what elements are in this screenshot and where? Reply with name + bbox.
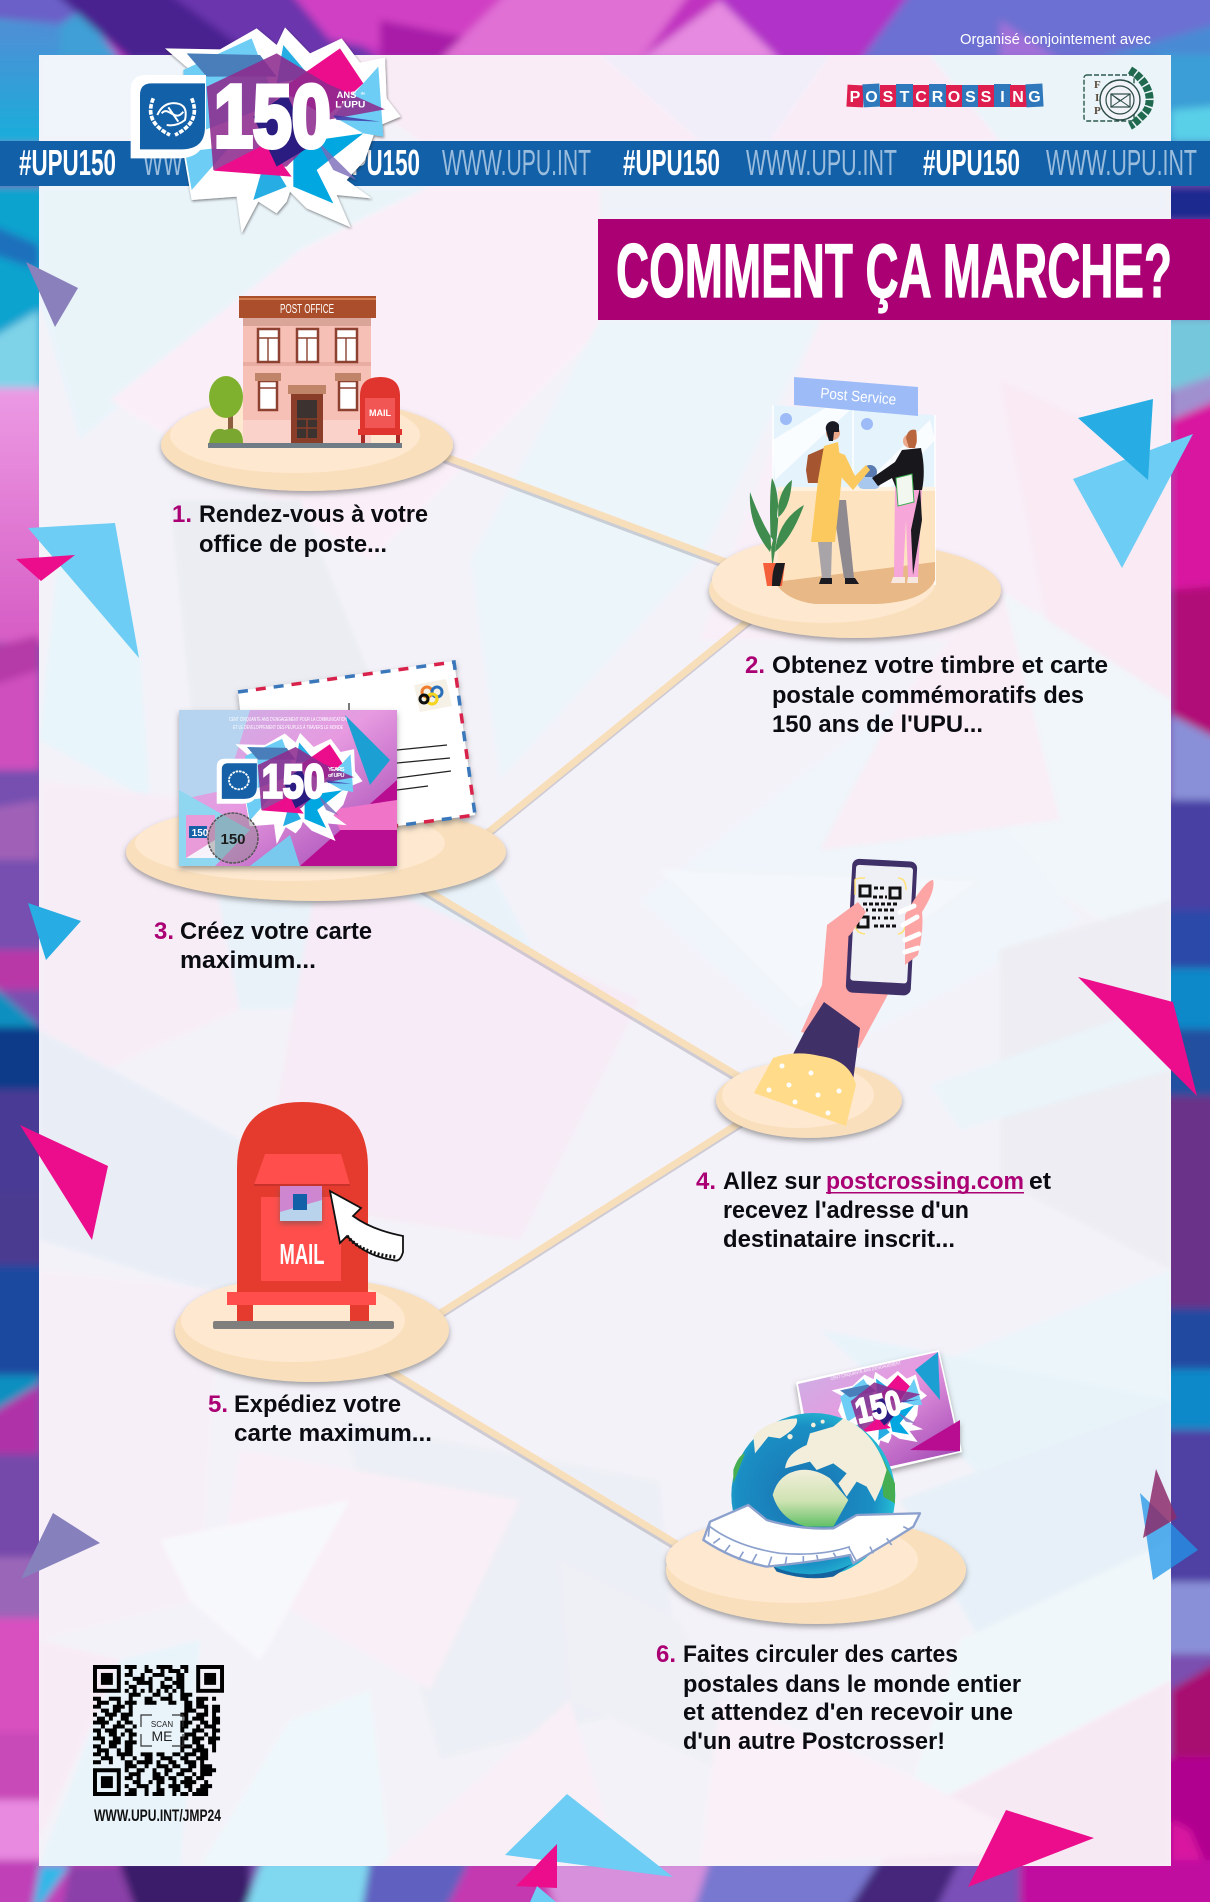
top strip	[0, 0, 1210, 60]
UPU badge	[131, 75, 206, 158]
header band: WWW.UPU.INT	[143, 142, 292, 183]
text: step 3: maximum...	[180, 947, 316, 974]
step 5: mailbox	[175, 1102, 449, 1447]
text: step 4: destinataire inscrit...	[723, 1226, 955, 1253]
header band: #UPU150	[923, 142, 1020, 183]
scan me label: SCAN	[151, 1720, 173, 1729]
icon: front of maximum card: CENT CINQUANTE ANS D'ENGAGEMENT POUR LA COMMUNICATION	[229, 717, 347, 723]
header band: #UPU150	[19, 142, 116, 183]
ANS de L'UPU	[335, 90, 366, 110]
text: step 6: postales dans le monde entier	[683, 1671, 1021, 1698]
text: step 6: d'un autre Postcrosser!	[683, 1728, 945, 1755]
stamp and postmark: 150	[220, 831, 246, 848]
text: step 4	[696, 1168, 1051, 1253]
text: step 1: Rendez-vous à votre	[199, 501, 428, 528]
logo: Postcrossing: P	[850, 89, 861, 106]
text: step 6: et attendez d'en recevoir une	[683, 1699, 1013, 1726]
platform 1	[161, 397, 453, 491]
left strip	[0, 24, 60, 1870]
logo: FIP: P	[1094, 105, 1101, 117]
stamp and postmark: 150	[192, 828, 209, 839]
logo: Postcrossing: G	[1028, 89, 1041, 106]
text: step 6: 6.	[656, 1641, 676, 1668]
logo: Postcrossing: I	[1000, 89, 1005, 106]
icon: front of maximum card: ET LE DÉVELOPPEMENT DES PEUPLES À TRAVERS LE MONDE	[233, 724, 343, 731]
ANS de L'UPU: L'UPU	[335, 100, 366, 110]
text: step 3: 3.	[154, 918, 174, 945]
QR url: WWW.UPU.INT/JMP24	[94, 1806, 221, 1825]
icon: tree	[209, 376, 243, 443]
logo: UPU 150 starburst	[131, 27, 401, 233]
mini starburst: 150	[852, 1384, 905, 1431]
text: step 2: Obtenez votre timbre et carte	[772, 652, 1108, 679]
icon: postcard behind globe: CENT CINQUANTE ANS D'ENGAGEMENT	[830, 1360, 901, 1381]
text: step 2: 150 ans de l'UPU...	[772, 711, 983, 738]
logo: Postcrossing: O	[865, 89, 878, 106]
right strip	[1160, 55, 1210, 1902]
logo: FIP: F	[1094, 79, 1101, 91]
scan me label: ME	[152, 1728, 172, 1744]
icon: globe	[703, 1413, 920, 1578]
platform 6	[666, 1516, 966, 1624]
organised with label: Organisé conjointement avec	[960, 31, 1151, 48]
icon: red mail box: MAIL	[280, 1239, 324, 1271]
text: step 4: Allez sur	[723, 1168, 821, 1195]
clerk	[858, 465, 880, 489]
stamp and postmark	[186, 813, 258, 863]
header band: WWW.UPU.INT	[442, 142, 591, 183]
mini starburst logo: 150	[262, 755, 325, 808]
mini starburst logo: YEARS	[328, 767, 345, 773]
text: step 5: Expédiez votre	[234, 1391, 401, 1418]
header band: #UPU150	[323, 142, 420, 183]
icon: counter scene	[750, 377, 935, 604]
text: step 3: Créez votre carte	[180, 918, 372, 945]
text: step 4: 4.	[696, 1168, 716, 1195]
logo: Postcrossing: C	[915, 89, 927, 106]
step 2: post service	[709, 377, 1108, 738]
step 3: maximum card	[126, 661, 506, 974]
logo: Postcrossing: S	[981, 89, 992, 106]
mini starburst logo: of UPU	[328, 773, 345, 779]
woman in pink	[872, 430, 924, 583]
man in yellow coat	[806, 421, 870, 584]
text: step 1	[172, 501, 428, 558]
text: step 4: recevez l'adresse d'un	[723, 1197, 969, 1224]
bottom strip	[0, 1860, 1210, 1902]
potted plant	[750, 478, 804, 586]
text: step 6: Faites circuler des cartes	[683, 1641, 958, 1668]
text: step 4: postcrossing.com	[826, 1168, 1024, 1195]
logo: Postcrossing: S	[883, 89, 894, 106]
logo: Postcrossing: S	[965, 89, 976, 106]
150 number: 150	[214, 67, 331, 166]
phone QR code	[855, 878, 906, 934]
text: step 5: carte maximum...	[234, 1420, 432, 1447]
icon: red mailbox	[358, 377, 402, 444]
text: step 2: postale commémoratifs des	[772, 682, 1084, 709]
icon: hand holding phone	[754, 858, 934, 1126]
icon: counter scene: Post Service	[820, 385, 897, 409]
text: step 1: office de poste...	[199, 531, 387, 558]
header band: WWW.UPU.INT	[746, 142, 897, 183]
header band: #UPU150	[623, 142, 720, 183]
ANS de L'UPU: de	[361, 91, 366, 96]
text: step 5: 5.	[208, 1391, 228, 1418]
platform 5	[175, 1278, 449, 1382]
white circular arrow	[703, 1505, 920, 1567]
icon: postcard behind globe	[796, 1350, 962, 1470]
icon: front of maximum card	[179, 710, 397, 866]
logo: Postcrossing: T	[900, 89, 910, 106]
logo: Postcrossing	[846, 84, 1044, 107]
text: step 1: 1.	[172, 501, 192, 528]
icon: red mailbox: MAIL	[369, 408, 391, 418]
text: step 6	[656, 1641, 1021, 1755]
step 6: globe	[656, 1350, 1021, 1755]
QR code block	[93, 1665, 224, 1825]
step 1: post office	[161, 296, 453, 558]
mini starburst	[830, 1362, 937, 1461]
icon: red mail box	[213, 1102, 403, 1329]
logo: FIP: I	[1095, 92, 1099, 104]
platform 4	[716, 1062, 902, 1138]
icon: white arrow	[330, 1191, 403, 1261]
icon: post office building: POST OFFICE	[280, 301, 334, 316]
icon: post office building	[208, 296, 402, 448]
platform 2	[709, 537, 1001, 638]
logo: FIP	[1084, 70, 1150, 126]
header band	[0, 141, 1210, 186]
logo: Postcrossing: O	[948, 89, 960, 106]
text: step 2: 2.	[745, 652, 765, 679]
logo: Postcrossing: R	[932, 89, 944, 106]
icon: back of postcard	[238, 661, 475, 846]
text: step 5	[208, 1391, 432, 1447]
scan me label	[141, 1715, 183, 1746]
step 4: phone and QR	[696, 858, 1051, 1253]
text: step 4: et	[1029, 1168, 1051, 1195]
platform 3	[126, 803, 506, 901]
text: step 2	[745, 652, 1108, 738]
logo: Postcrossing: N	[1012, 89, 1024, 106]
text: step 3	[154, 918, 372, 974]
mini starburst logo	[217, 733, 363, 844]
ANS de L'UPU: ANS	[337, 90, 356, 100]
QR matrix	[93, 1665, 224, 1796]
connector lines between steps	[374, 451, 760, 1558]
